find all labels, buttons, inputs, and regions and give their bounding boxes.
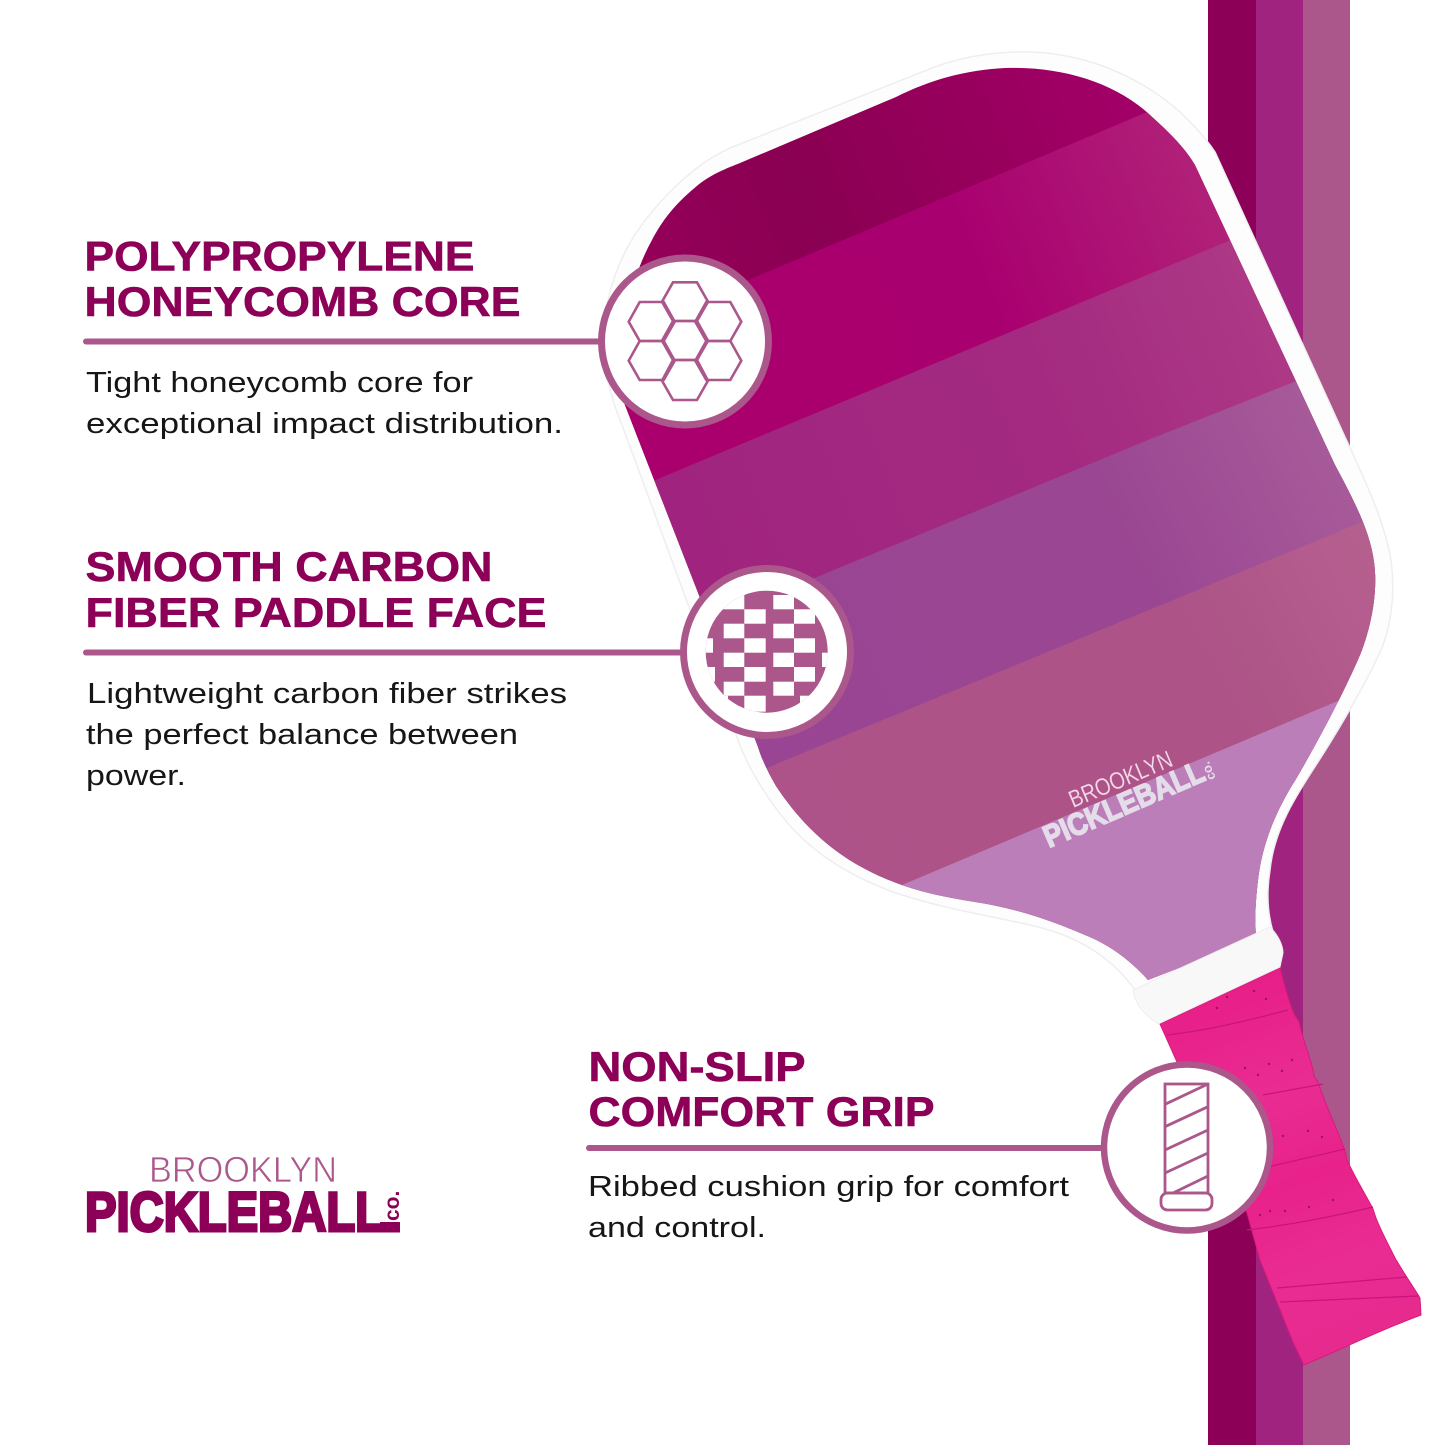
brand logo: PICKLEBALL xyxy=(85,1180,384,1243)
heading: comfort grip: COMFORT GRIP xyxy=(588,1088,934,1135)
handle collar xyxy=(1133,927,1283,1024)
heading: carbon fiber xyxy=(86,543,546,636)
paddle logo: BROOKLYN xyxy=(1065,746,1177,814)
body text: carbon fiber: the perfect balance between xyxy=(86,719,518,751)
body text: honeycomb core xyxy=(86,367,563,440)
heading: comfort grip: NON-SLIP xyxy=(588,1043,806,1090)
paddle logo: PICKLEBALL xyxy=(1038,754,1210,854)
icon: wrapped grip xyxy=(1104,1064,1270,1230)
heading: carbon fiber: SMOOTH CARBON xyxy=(86,543,492,590)
panel: comfort grip xyxy=(586,1043,1270,1244)
connector line: carbon fiber xyxy=(83,650,687,656)
heading: honeycomb core: HONEYCOMB CORE xyxy=(84,278,520,325)
handle grip xyxy=(1160,968,1421,1365)
body text: carbon fiber: Lightweight carbon fiber strikes xyxy=(87,678,567,710)
brand logo: co. xyxy=(381,1191,404,1221)
heading: honeycomb core: POLYPROPYLENE xyxy=(84,232,474,280)
connector line: honeycomb core xyxy=(83,338,603,344)
icon: honeycomb xyxy=(602,258,768,425)
body text: comfort grip: Ribbed cushion grip for comfort xyxy=(588,1171,1069,1203)
brand logo: BROOKLYN xyxy=(149,1149,337,1190)
heading: honeycomb core xyxy=(84,232,520,325)
heading: comfort grip xyxy=(588,1043,934,1135)
pickleball paddle xyxy=(598,51,1422,1366)
body text: honeycomb core: exceptional impact distribution. xyxy=(86,408,563,440)
background stripes xyxy=(1208,0,1350,1445)
paddle face colour bands xyxy=(624,68,1376,980)
body text: carbon fiber xyxy=(86,678,567,792)
brand logo xyxy=(85,1149,404,1243)
body text: comfort grip xyxy=(588,1171,1069,1244)
paddle logo: co. xyxy=(1198,760,1219,783)
body text: carbon fiber: power. xyxy=(86,760,186,792)
body text: comfort grip: and control. xyxy=(588,1212,766,1244)
connector line: comfort grip xyxy=(586,1145,1106,1151)
heading: carbon fiber: FIBER PADDLE FACE xyxy=(86,589,546,636)
paddle white edge guard xyxy=(603,52,1393,990)
body text: honeycomb core: Tight honeycomb core for xyxy=(86,367,473,399)
panel: honeycomb core xyxy=(83,232,768,440)
icon: carbon weave checker xyxy=(684,568,850,736)
panel: carbon fiber face xyxy=(83,543,850,792)
